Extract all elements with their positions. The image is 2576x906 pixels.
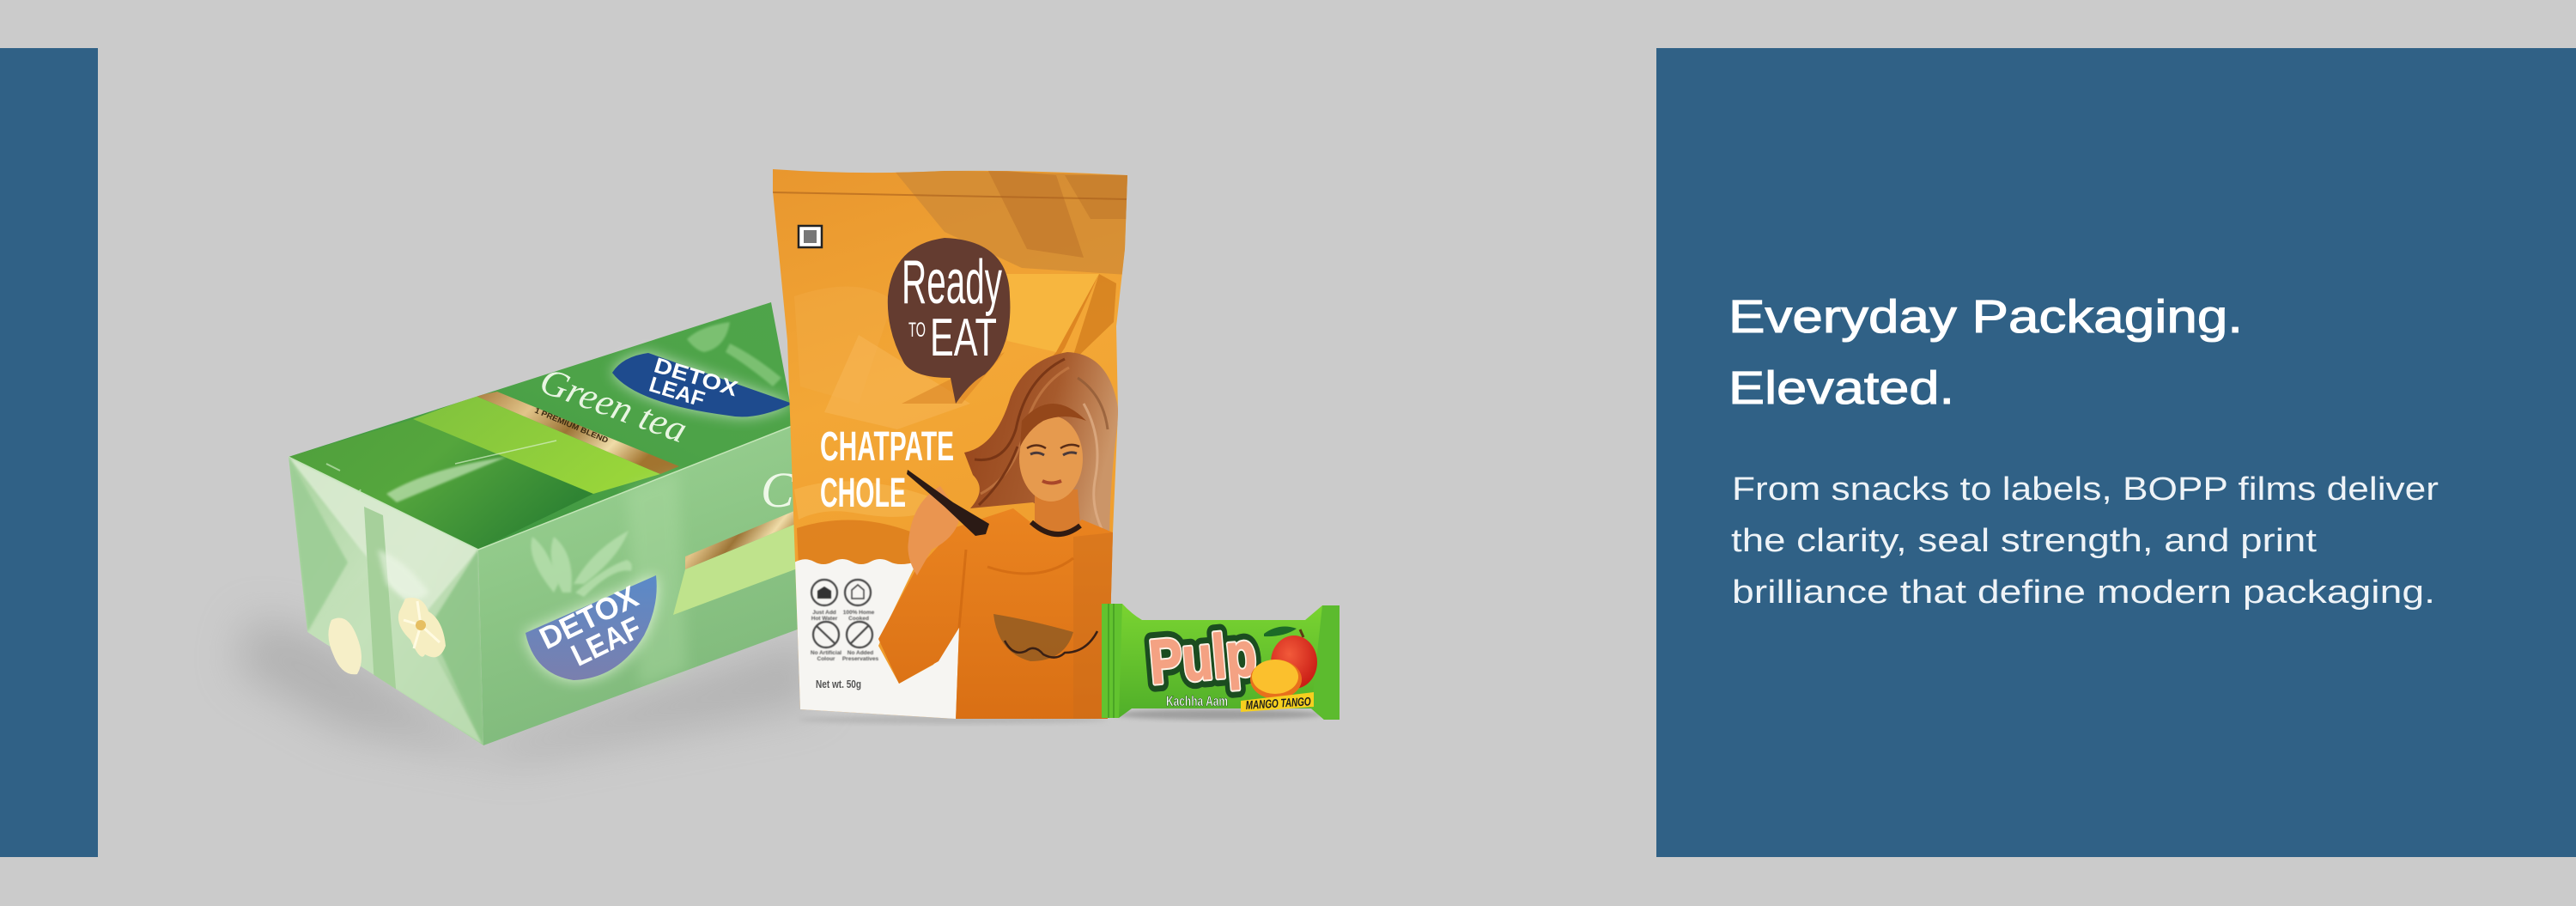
icon group: product claims: No Added — [848, 650, 873, 656]
icon: mango — [1250, 627, 1317, 699]
speech bubble logo: Ready — [902, 248, 1002, 317]
icon: flowers — [328, 598, 446, 674]
speech bubble logo: EAT — [930, 308, 997, 368]
shirt print — [993, 614, 1097, 661]
top blue label — [612, 353, 793, 420]
kachha aam: Kachha Aam — [1166, 693, 1228, 709]
top blue label: LEAF — [647, 373, 708, 412]
body text: the clarity, seal strength, and print — [1731, 523, 2318, 559]
heading: Everyday Packaging. — [1728, 291, 2243, 343]
wrapper — [1102, 604, 1340, 720]
script: green tea: Green tea — [535, 359, 693, 451]
panel: text panel — [1656, 48, 2576, 857]
icon group: product claims: Just Add — [812, 610, 836, 616]
icon: qr code — [799, 226, 822, 247]
seal line — [773, 192, 1127, 199]
neck and face — [1035, 489, 1080, 532]
product: pulp candy — [1102, 604, 1340, 720]
gold strip text: 1 PREMIUM BLEND — [533, 406, 610, 445]
speech bubble logo — [888, 238, 1010, 404]
net weight: Net wt. 50g — [816, 678, 861, 690]
box top face — [289, 302, 790, 550]
front band — [673, 511, 802, 615]
heading — [1728, 291, 2243, 414]
hair — [964, 352, 1119, 544]
pulp logo: Pulp — [1146, 619, 1259, 697]
box front face — [478, 425, 802, 745]
top blue label: DETOX — [651, 353, 741, 401]
box edge highlight — [289, 425, 794, 550]
pouch facets — [794, 169, 1127, 567]
speech bubble logo: TO — [908, 319, 926, 342]
product: shadows — [236, 618, 1322, 760]
mango tango label: MANGO TANGO — [1245, 694, 1311, 712]
icon group: product claims: Colour — [817, 656, 835, 662]
icon group: product claims: Cooked — [848, 616, 869, 622]
front logo: LEAF — [566, 610, 647, 673]
front logo: DETOX — [534, 579, 643, 656]
pulp logo: Pulp — [1146, 619, 1259, 697]
body text: brilliance that define modern packaging. — [1732, 575, 2435, 611]
icon group: product claims: Hot Water — [811, 616, 838, 622]
top leaf art — [687, 322, 781, 386]
body text: From snacks to labels, BOPP films deliver — [1732, 471, 2439, 508]
product: ready to eat pouch — [764, 163, 1133, 730]
script on front: Cr — [761, 462, 814, 518]
white base — [794, 559, 959, 721]
product name: CHOLE — [820, 471, 906, 516]
heading: Elevated. — [1728, 362, 1954, 414]
hand and stick — [908, 486, 960, 575]
icon group: product claims — [811, 580, 879, 662]
icon group: product claims: Preservatives — [842, 656, 879, 662]
left accent bar — [0, 48, 98, 857]
pouch body — [764, 163, 1133, 730]
icon group: product claims: 100% Home — [843, 610, 875, 616]
front logo — [526, 575, 657, 682]
pulp logo: Pulp — [1146, 619, 1259, 697]
front leaves — [531, 531, 632, 597]
shirt — [878, 508, 1116, 721]
box end with wrap — [289, 457, 483, 745]
mango tango label — [1241, 692, 1314, 712]
icon group: product claims: No Artificial — [811, 650, 841, 656]
body text — [1731, 471, 2439, 611]
product name — [820, 424, 954, 516]
product name: CHATPATE — [820, 424, 954, 470]
product: green tea box — [275, 292, 814, 745]
